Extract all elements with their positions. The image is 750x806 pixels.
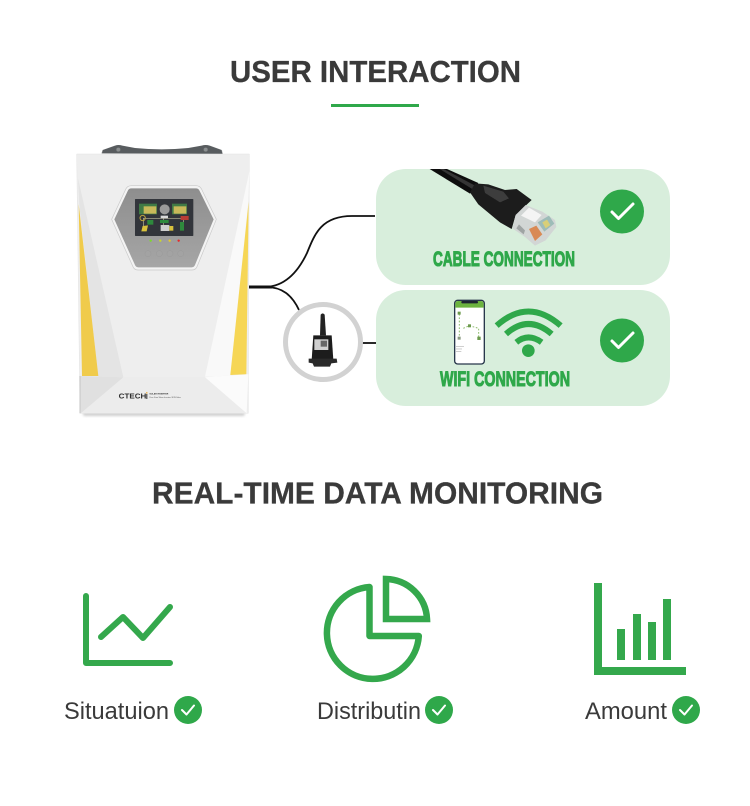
label: situatuion: Situatuion: [64, 698, 169, 725]
label: cable connection: CABLE CONNECTION: [433, 247, 575, 271]
icon: phone: [455, 300, 484, 364]
icon: check: [174, 696, 202, 724]
left facet: [78, 178, 123, 377]
inverter shadow: [82, 412, 245, 416]
wifi module sticker: [314, 339, 328, 350]
lower right facet: [205, 374, 248, 413]
icon: check: [600, 318, 644, 362]
icon: line chart: [86, 596, 170, 663]
body left edge: [78, 376, 81, 413]
icon: wifi: [497, 311, 561, 357]
lower left facet: [80, 376, 123, 413]
label: distributin: Distributin: [317, 698, 421, 725]
icon: check: [425, 696, 453, 724]
panel: cable connection: [376, 169, 670, 285]
brand label: Pure Sine Wave Inverter 3KW Solar: [149, 396, 181, 399]
icon: check: [600, 190, 644, 234]
brand label: SOLAR INVERTER: [149, 392, 169, 395]
brand label: CTECH: [119, 394, 146, 401]
wifi module circle: [286, 304, 360, 380]
cable connectors: [249, 216, 376, 343]
inverter body: [77, 154, 249, 413]
icon: check: [672, 696, 700, 724]
inverter device: [77, 145, 249, 416]
wifi module base: [309, 359, 337, 367]
left yellow stripe: [79, 204, 98, 376]
panel: wifi connection: [376, 290, 670, 406]
title underline: [331, 104, 419, 107]
icon: pie chart: [327, 579, 427, 679]
wifi module body: [312, 335, 333, 360]
icon: ethernet plug: [430, 169, 556, 246]
lcd screen: [135, 199, 193, 236]
inverter handle: [102, 145, 223, 154]
item: situation: [64, 596, 202, 725]
item: distribution: [317, 579, 453, 725]
status leds: [149, 239, 180, 242]
panel buttons: [145, 251, 184, 257]
right facet: [205, 172, 249, 377]
lower panel: [80, 374, 248, 413]
title: real-time data monitoring: REAL-TIME DATA MONITORING: [152, 476, 603, 510]
label: amount: Amount: [585, 698, 667, 725]
brand label: [119, 392, 181, 401]
icon: bar chart: [594, 583, 686, 675]
title: user interaction: USER INTERACTION: [230, 55, 521, 89]
right yellow stripe: [230, 202, 249, 375]
control panel: [112, 186, 216, 270]
wifi module antenna: [320, 313, 326, 335]
label: wifi connection: WIFI CONNECTION: [440, 367, 570, 391]
item: amount: [585, 583, 700, 725]
